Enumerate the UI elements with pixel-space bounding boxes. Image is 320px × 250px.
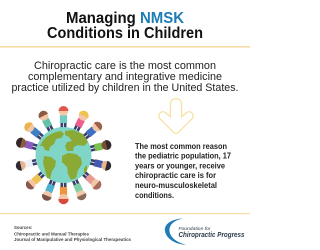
logo swoosh — [165, 218, 186, 245]
logo text — [178, 226, 244, 239]
children ring — [15, 106, 112, 204]
intro text — [12, 60, 238, 94]
icon: down arrow — [159, 99, 193, 133]
globe — [36, 127, 92, 183]
callout text: conditions. — [135, 191, 174, 200]
sources: Journal of Manipulative and Physiological Therapeutics — [14, 237, 132, 242]
callout text — [135, 142, 231, 200]
top divider — [0, 46, 250, 48]
bottom divider — [0, 213, 250, 214]
globe with children — [15, 106, 112, 204]
intro text: practice utilized by children in the United States. — [12, 82, 238, 94]
title: Conditions in Children — [47, 25, 203, 42]
callout text: The most common reason — [135, 142, 227, 151]
intro text: Chiropractic care is the most common — [34, 60, 216, 72]
logo — [165, 218, 244, 245]
callout text: chiropractic care is for — [135, 171, 217, 180]
logo text: Foundation for — [178, 226, 211, 232]
sources: Chiropractic and Manual Therapies — [14, 232, 90, 236]
sources: Sources: — [14, 225, 33, 230]
callout text: the pediatric population, 17 — [135, 152, 231, 160]
title — [47, 10, 203, 42]
callout text: neuro-musculoskeletal — [135, 181, 217, 190]
title: Managing NMSK — [66, 10, 185, 27]
callout text: years or younger, receive — [135, 162, 225, 170]
sources — [14, 225, 132, 242]
intro text: complementary and integrative medicine — [28, 71, 222, 83]
